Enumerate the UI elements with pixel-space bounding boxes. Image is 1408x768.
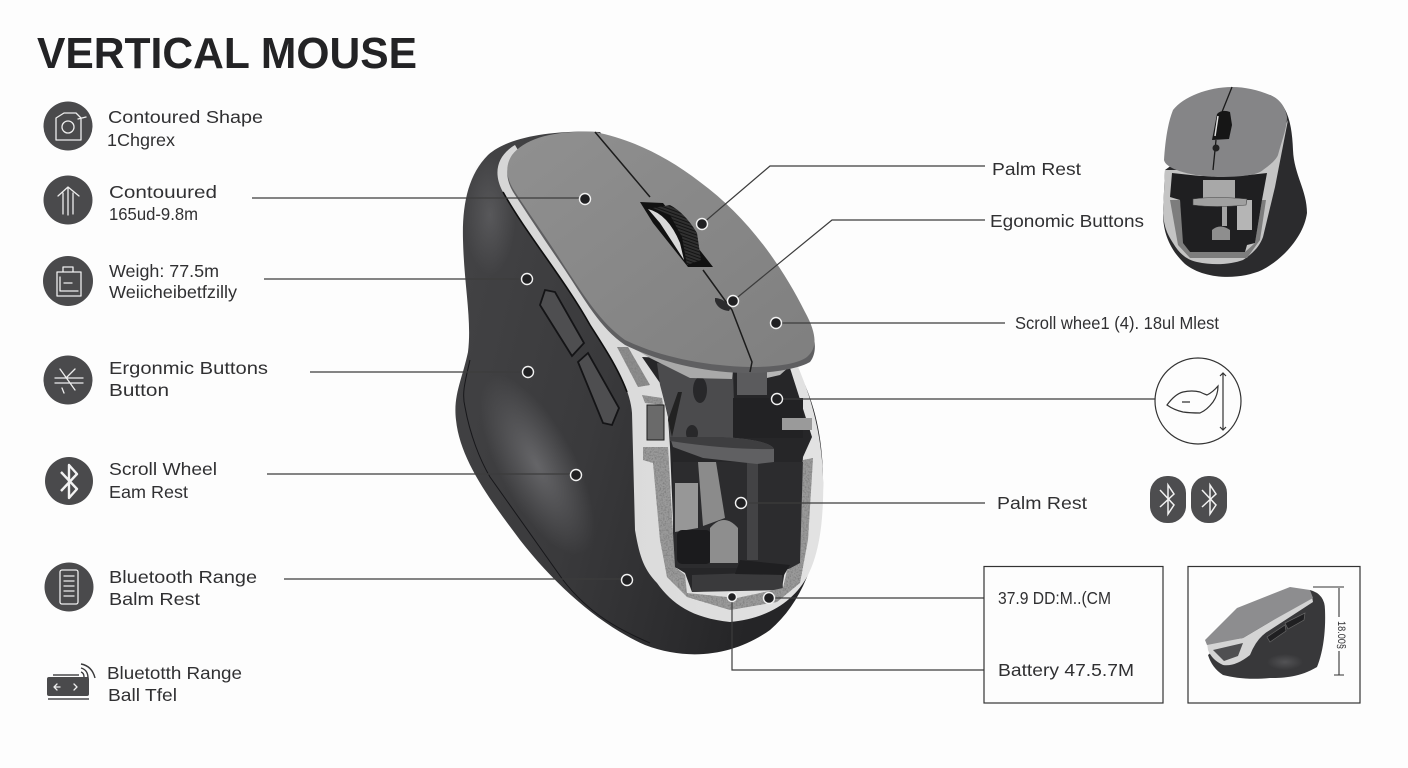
bluetooth badges: [1150, 476, 1227, 523]
feature text: scroll wheel: Eam Rest: [109, 482, 188, 502]
foam layer: [643, 447, 813, 610]
side button lower: [578, 353, 619, 425]
left leader lines: [252, 198, 627, 579]
feature text: ergonomic buttons: [109, 358, 268, 400]
label: palm rest top: Palm Rest: [992, 159, 1081, 179]
small mouse foam strips: [1170, 200, 1266, 258]
right leader lines: [702, 166, 1155, 670]
feature text: contoured: Contouured: [109, 182, 217, 202]
top lid: [507, 132, 815, 373]
icon: wireless receiver: [47, 664, 95, 699]
lower interior parts: [673, 462, 803, 568]
scroll wheel slot: [640, 202, 713, 267]
feature text: bluetooth range: [109, 567, 257, 609]
icon: weight: [43, 256, 93, 306]
feature text: weight: Weigh: 77.5m: [109, 261, 219, 281]
feature text: scroll wheel: [109, 459, 217, 502]
feature text: contoured shape: 1Chgrex: [107, 130, 175, 150]
icon: battery: [44, 562, 94, 612]
label: palm rest lower: Palm Rest: [997, 493, 1087, 513]
feature text: contoured shape: Contoured Shape: [108, 107, 263, 127]
lid underside flanges: [628, 345, 733, 379]
dimension box with side view mouse: [1188, 566, 1360, 703]
lid split line: [595, 132, 752, 372]
feature text: ergonomic buttons: Ergonmic Buttons: [109, 358, 268, 378]
spec box: 37.9 DD:M..(CM: [998, 588, 1111, 608]
feature text: contoured shape: [107, 107, 263, 150]
interior cavity: [642, 357, 812, 592]
callout dots: [522, 194, 782, 604]
small mouse cavity: [1170, 173, 1267, 252]
label: ergonomic buttons: Egonomic Buttons: [990, 211, 1144, 231]
body seam line: [464, 360, 650, 643]
small mouse lid: [1164, 87, 1287, 177]
icon: contoured arrow: [44, 176, 92, 224]
mouse body shell: [455, 132, 823, 654]
dimension value: 18.00§: [1335, 621, 1347, 649]
feature text: weight: Weiicheibetfzilly: [109, 282, 237, 302]
feature text: bluetooth range receiver: [107, 663, 242, 705]
feature text: contoured: [109, 182, 217, 224]
side button upper: [540, 290, 584, 356]
feature text: bluetooth range: Balm Rest: [109, 589, 200, 609]
icon: contoured shape: [44, 102, 92, 150]
small mouse band: [1163, 120, 1288, 264]
cutaway window: [647, 405, 664, 440]
feature text: bluetooth range receiver: Bluetotth Range: [107, 663, 242, 683]
center button: [715, 298, 731, 311]
feature text: weight: [109, 261, 237, 302]
side view mouse: [1205, 587, 1325, 679]
feature text: scroll wheel: Scroll Wheel: [109, 459, 217, 479]
spec box: Battery 47.5.7M: [998, 660, 1134, 680]
feature text: contoured: 165ud-9.8m: [109, 204, 198, 224]
scroll wheel: [653, 205, 701, 265]
title: VERTICAL MOUSE: [37, 29, 417, 78]
dimension line: [1313, 587, 1344, 675]
small mouse view: top right: [1163, 87, 1307, 277]
main mouse cutaway illustration: [455, 132, 823, 654]
feature text: ergonomic buttons: Button: [109, 380, 169, 400]
spec box: [984, 566, 1163, 703]
silver trim and cutaway band: [497, 145, 823, 622]
interior back wall: [657, 363, 735, 438]
feature text: bluetooth range receiver: Ball Tfel: [108, 685, 177, 705]
icon: bluetooth: [45, 457, 93, 505]
small mouse body: [1163, 95, 1307, 277]
icon: ergonomic buttons: [44, 356, 92, 404]
hand size icon in circle: [1155, 358, 1241, 444]
label: scroll wheel: Scroll whee1 (4). 18ul Mlest: [1015, 313, 1219, 333]
feature text: bluetooth range: Bluetooth Range: [109, 567, 257, 587]
curved interior shelf: [670, 437, 774, 464]
